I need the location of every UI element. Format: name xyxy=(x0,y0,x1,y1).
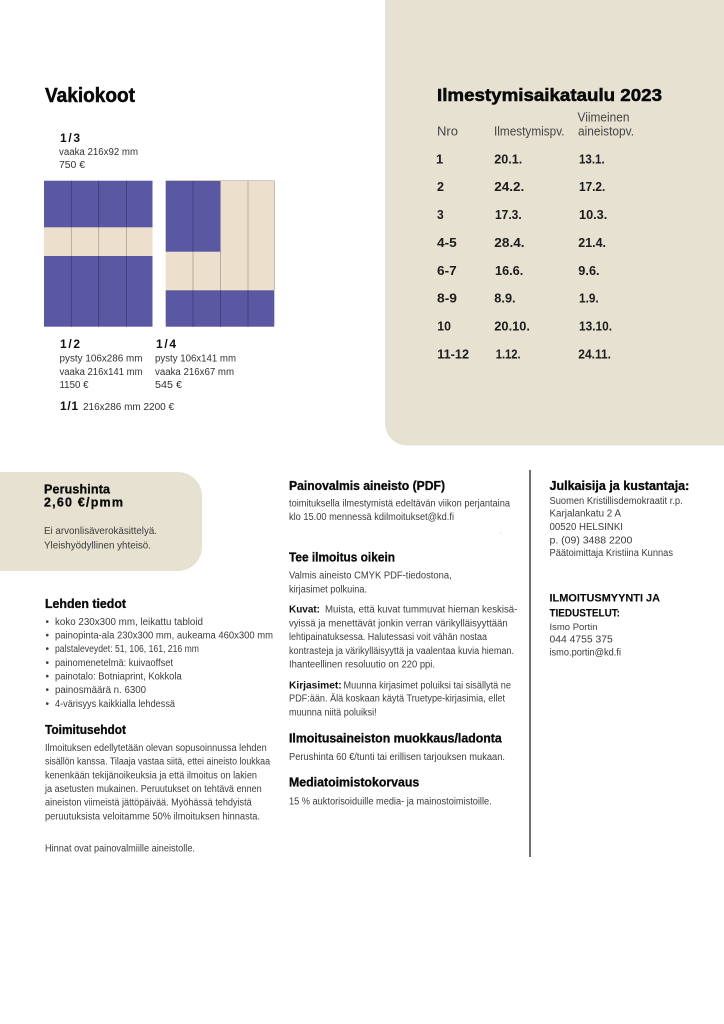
text: full page size: 216x286 mm 2200 € xyxy=(83,402,174,413)
text: file format xyxy=(289,571,452,595)
text: terms paragraph: peruutuksista veloitamme 50% ilmoituksen hinnasta. xyxy=(45,812,260,822)
text: one third size: 1/3 xyxy=(60,131,80,145)
table rows: 1 xyxy=(436,151,443,166)
bullet list: koko 230x300 mm, leikattu tabloid xyxy=(55,617,203,628)
text: one third size xyxy=(59,131,138,171)
table rows: 11-12 xyxy=(437,346,469,361)
text: sales contact: ismo.portin@kd.fi xyxy=(550,648,621,659)
section: publication schedule xyxy=(436,85,662,361)
text: one third size: vaaka 216x92 mm xyxy=(59,147,138,158)
table rows: 1.9. xyxy=(579,291,599,306)
bullet list: • xyxy=(46,644,50,655)
text: full page size xyxy=(60,399,174,413)
bullet list: • xyxy=(46,685,50,696)
text: sales contact: 044 4755 375 xyxy=(550,635,613,646)
heading: ad sales and enquiries xyxy=(550,593,660,620)
text: one half size: 1/2 xyxy=(60,337,80,351)
diagram: horizontal layout xyxy=(44,181,152,327)
text: one quarter size: 545 € xyxy=(155,380,182,391)
text: deadline xyxy=(289,499,510,523)
section: print-ready material xyxy=(289,479,510,523)
callout: base price xyxy=(44,482,157,551)
text: publisher contact: 00520 HELSINKI xyxy=(550,522,623,533)
text: publisher contact: Suomen Kristillisdemokraatit r.p. xyxy=(550,496,683,507)
text: one half size: pysty 106x286 mm xyxy=(60,354,142,365)
text: images guidance: kontrasteja ja värikylläisyyttä ja vaalentaa kuvia hieman. xyxy=(289,646,514,657)
text: terms paragraph xyxy=(44,743,270,822)
text: fonts guidance: Muunna kirjasimet poluiksi tai sisällytä ne xyxy=(344,680,511,691)
text: images guidance: Ihanteellinen resoluutio on 220 ppi. xyxy=(289,660,435,671)
text: fonts guidance: PDF:ään. Älä koskaan käytä Truetype-kirjasimia, ellet xyxy=(289,693,505,705)
section: ad sales xyxy=(550,593,660,659)
text: terms paragraph: kenenkään tekijänoikeuksia ja että ilmoitus on lakien xyxy=(45,770,257,781)
text: price note: Hinnat ovat painovalmiille aineistolle. xyxy=(45,844,195,855)
table header: Ilmestymispv. xyxy=(494,124,564,139)
bullet list: • xyxy=(46,617,50,628)
callout: base price: Yleishyödyllinen yhteisö. xyxy=(44,540,151,551)
text: terms paragraph: sisällön kanssa. Tilaaja vastaa siitä, ettei aineisto loukkaa xyxy=(45,756,270,768)
text: terms paragraph: aineiston viimeistä jättöpäivää. Myöhässä tehdyistä xyxy=(45,798,252,809)
table rows: 17.3. xyxy=(495,207,522,222)
table rows: 9.6. xyxy=(578,263,600,278)
text: deadline: toimituksella ilmestymistä edeltävän viikon perjantaina xyxy=(289,499,510,510)
table rows: 28.4. xyxy=(494,235,525,250)
heading: Painovalmis aineisto: Painovalmis aineisto (PDF) xyxy=(289,479,445,493)
text: one half size: 1150 € xyxy=(60,380,89,391)
text: publisher contact xyxy=(550,496,683,559)
table rows: 13.10. xyxy=(579,318,612,334)
bullet list: painosmäärä n. 6300 xyxy=(55,685,146,696)
text: fonts guidance xyxy=(289,680,511,718)
bullet list: painopinta-ala 230x300 mm, aukeama 460x300 mm xyxy=(55,630,273,642)
text: one third size: 750 € xyxy=(59,160,85,171)
table rows: 20.1. xyxy=(494,151,522,166)
text: one quarter size: pysty 106x141 mm xyxy=(155,354,236,365)
text: images guidance xyxy=(289,605,517,671)
table rows xyxy=(436,151,612,361)
heading: Toimitusehdot: Toimitusehdot xyxy=(45,723,127,737)
text: commission: 15 % auktorisoiduille media- ja mainostoimistoille. xyxy=(289,796,492,807)
table rows: 4-5 xyxy=(437,235,457,250)
bullet list: palstaleveydet: 51, 106, 161, 216 mm xyxy=(55,644,199,655)
text: full page size: 1/1 xyxy=(60,399,78,413)
text: publisher contact: Päätoimittaja Kristiina Kunnas xyxy=(550,548,673,559)
table rows: 1.12. xyxy=(496,346,521,361)
section: publisher xyxy=(550,479,689,559)
section: agency commission xyxy=(289,776,492,807)
table rows: 24.2. xyxy=(494,179,524,194)
panel: schedule background xyxy=(385,0,724,446)
bullet list: painomenetelmä: kuivaoffset xyxy=(55,658,173,669)
bullet list: • xyxy=(46,699,50,710)
heading: Tee ilmoitus oikein: Tee ilmoitus oikein xyxy=(289,551,395,565)
text: file format: Valmis aineisto CMYK PDF-tiedostona, xyxy=(289,571,452,582)
table rows: 8.9. xyxy=(494,291,516,306)
heading: ad sales and enquiries: ILMOITUSMYYNTI JA xyxy=(550,593,660,605)
bullet list: • xyxy=(46,630,50,642)
diagram: mixed layout xyxy=(166,181,274,327)
table rows: 24.11. xyxy=(578,346,611,361)
text: deadline: klo 15.00 mennessä kdilmoitukset@kd.fi xyxy=(289,512,454,523)
table rows: 13.1. xyxy=(579,151,605,166)
heading: schedule title: Ilmestymisaikataulu 2023 xyxy=(437,85,662,105)
text: editing price: Perushinta 60 €/tunti tai erillisen tarjouksen mukaan. xyxy=(289,752,505,763)
section: delivery terms xyxy=(44,723,270,855)
table rows: 17.2. xyxy=(579,179,605,194)
table header xyxy=(437,110,634,139)
panel: base price background xyxy=(0,472,202,571)
bullet list: • xyxy=(46,672,50,683)
heading: Lehden tiedot: Lehden tiedot xyxy=(45,597,127,611)
table rows: 6-7 xyxy=(437,263,457,278)
text: images guidance: lehtipainatuksessa. Halutessasi voit vähän nostaa xyxy=(289,632,487,643)
text: images guidance: Muista, että kuvat tummuvat hieman keskisä- xyxy=(325,605,517,616)
text: one quarter size: 1/4 xyxy=(156,337,176,351)
heading: Vakiokoot: Vakiokoot xyxy=(45,85,135,107)
text: sales contact: Ismo Portin xyxy=(550,622,598,633)
table rows: 16.6. xyxy=(495,263,523,278)
text: terms paragraph: Ilmoituksen edellytetään olevan sopusoinnussa lehden xyxy=(45,743,267,754)
table header: Nro xyxy=(437,124,458,139)
section: editing fee xyxy=(289,731,505,763)
table rows: 2 xyxy=(437,179,444,194)
table rows: 10.3. xyxy=(579,207,607,222)
section: standard sizes xyxy=(44,85,274,413)
heading: Ilmoitusaineiston muokkaus: Ilmoitusaineiston muokkaus/ladonta xyxy=(289,731,503,745)
text: fonts guidance: Kirjasimet: xyxy=(289,680,342,691)
text: one quarter size xyxy=(155,337,236,391)
table rows: 10 xyxy=(437,318,451,334)
table header: Viimeinen xyxy=(578,110,630,125)
text: one half size xyxy=(60,337,142,391)
table header: aineistopv. xyxy=(578,124,634,139)
text: images guidance: vyissä ja menettävät jonkin verran värikylläisyyttään xyxy=(289,619,508,630)
text: sales contact xyxy=(550,622,621,659)
callout: base price: 2,60 €/pmm xyxy=(44,496,123,510)
table rows: 3 xyxy=(437,207,444,222)
text: one quarter size: vaaka 216x67 mm xyxy=(155,367,234,378)
table rows: 20.10. xyxy=(494,318,530,334)
section: magazine details xyxy=(45,597,273,710)
text: images guidance: Kuvat: xyxy=(289,605,320,616)
table rows: 8-9 xyxy=(437,291,457,306)
text: publisher contact: p. (09) 3488 2200 xyxy=(550,535,633,546)
heading: Julkaisija ja kustantaja: Julkaisija ja kustantaja: xyxy=(550,479,689,493)
table rows: 21.4. xyxy=(578,235,606,250)
bullet list xyxy=(46,617,273,710)
text: publisher contact: Karjalankatu 2 A xyxy=(550,509,621,520)
text: terms paragraph: ja asetusten mukainen. Peruutukset on tehtävä ennen xyxy=(44,784,262,795)
section: how to make an ad xyxy=(289,551,517,718)
text: one half size: vaaka 216x141 mm xyxy=(60,367,142,378)
callout: base price: Ei arvonlisäverokäsittelyä. xyxy=(44,526,157,537)
text: file format: kirjasimet polkuina. xyxy=(289,584,367,595)
bullet list: • xyxy=(46,658,50,669)
bullet list: painotalo: Botniaprint, Kokkola xyxy=(55,672,182,683)
text: fonts guidance: muunna niitä poluiksi! xyxy=(289,707,377,718)
bullet list: 4-värisyys kaikkialla lehdessä xyxy=(55,699,175,710)
heading: ad sales and enquiries: TIEDUSTELUT: xyxy=(550,608,620,620)
heading: Mediatoimistokorvaus: Mediatoimistokorvaus xyxy=(289,776,419,790)
callout: base price: Perushinta xyxy=(44,482,111,496)
